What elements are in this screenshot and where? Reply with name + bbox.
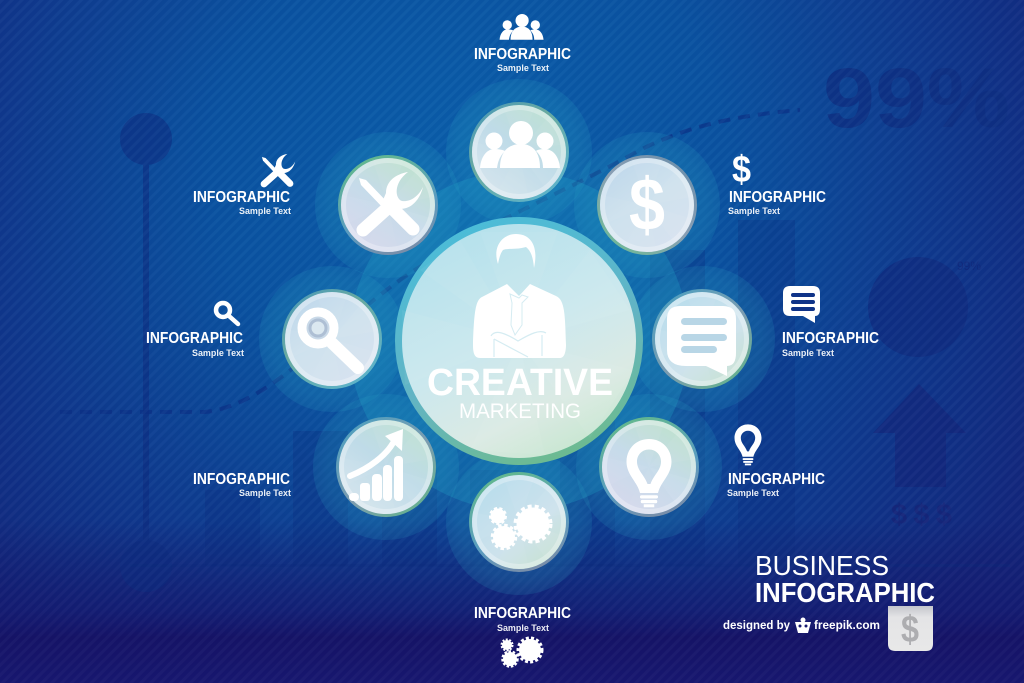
label: dollar: $ xyxy=(732,149,751,191)
background: 99 percent: 99% xyxy=(823,51,1010,145)
circle: tools xyxy=(340,156,436,254)
credit: designed by: designed by xyxy=(723,620,791,632)
background chart silhouette xyxy=(60,51,1010,592)
circle: light bulb xyxy=(600,418,698,516)
label: gears: INFOGRAPHIC xyxy=(474,605,571,622)
background: dashed growth line xyxy=(60,110,800,412)
circle: dollar: $ xyxy=(629,163,665,246)
label: dollar: INFOGRAPHIC xyxy=(729,189,826,206)
label: people: Sample Text xyxy=(497,63,549,73)
label: chat xyxy=(782,286,879,358)
label: magnifier xyxy=(146,303,244,358)
background: circle and percent: 99% xyxy=(957,259,981,273)
label: magnifier: INFOGRAPHIC xyxy=(146,330,243,347)
background: circle and percent xyxy=(868,257,981,357)
circle: growth chart xyxy=(338,418,434,516)
label: bulb xyxy=(727,424,825,498)
background: timeline pin xyxy=(120,113,172,592)
background: up arrow xyxy=(873,384,966,487)
label: dollar xyxy=(728,149,826,216)
facets xyxy=(402,232,634,455)
center circle xyxy=(398,220,640,462)
man silhouette xyxy=(473,234,566,358)
label: bulb: Sample Text xyxy=(727,488,779,498)
circle: magnifier xyxy=(284,290,380,388)
label: tools xyxy=(193,154,295,216)
label: people: INFOGRAPHIC xyxy=(474,46,571,63)
brand block xyxy=(723,550,935,651)
halos around circles xyxy=(259,79,775,595)
label: people xyxy=(474,14,571,73)
label: chart xyxy=(193,471,291,498)
circle: gears xyxy=(470,474,568,570)
circle: chat xyxy=(654,290,750,388)
icon: dollar tile: $ xyxy=(901,609,919,651)
label: gears xyxy=(474,605,571,666)
heading: infographic: INFOGRAPHIC xyxy=(755,577,935,608)
heading: business: BUSINESS xyxy=(755,550,889,581)
subtitle: marketing: MARKETING xyxy=(459,400,581,423)
credit: freepik: freepik.com xyxy=(814,620,880,632)
label: gears: Sample Text xyxy=(497,623,549,633)
label: magnifier: Sample Text xyxy=(192,348,244,358)
label: chart: INFOGRAPHIC xyxy=(193,471,290,488)
label: chat: INFOGRAPHIC xyxy=(782,330,879,347)
label: tools: Sample Text xyxy=(239,206,291,216)
label: dollar: Sample Text xyxy=(728,206,780,216)
circle: dollar xyxy=(598,156,696,254)
label: chart: Sample Text xyxy=(239,488,291,498)
icon: freepik crown xyxy=(795,618,811,633)
label: chat: Sample Text xyxy=(782,348,834,358)
circle: people xyxy=(470,104,568,200)
label: tools: INFOGRAPHIC xyxy=(193,189,290,206)
background: dollars: $$$ xyxy=(891,499,952,531)
icon: dollar tile xyxy=(888,606,933,651)
title: creative: CREATIVE xyxy=(427,362,613,404)
label: bulb: INFOGRAPHIC xyxy=(728,471,825,488)
background: bars xyxy=(130,220,1010,567)
